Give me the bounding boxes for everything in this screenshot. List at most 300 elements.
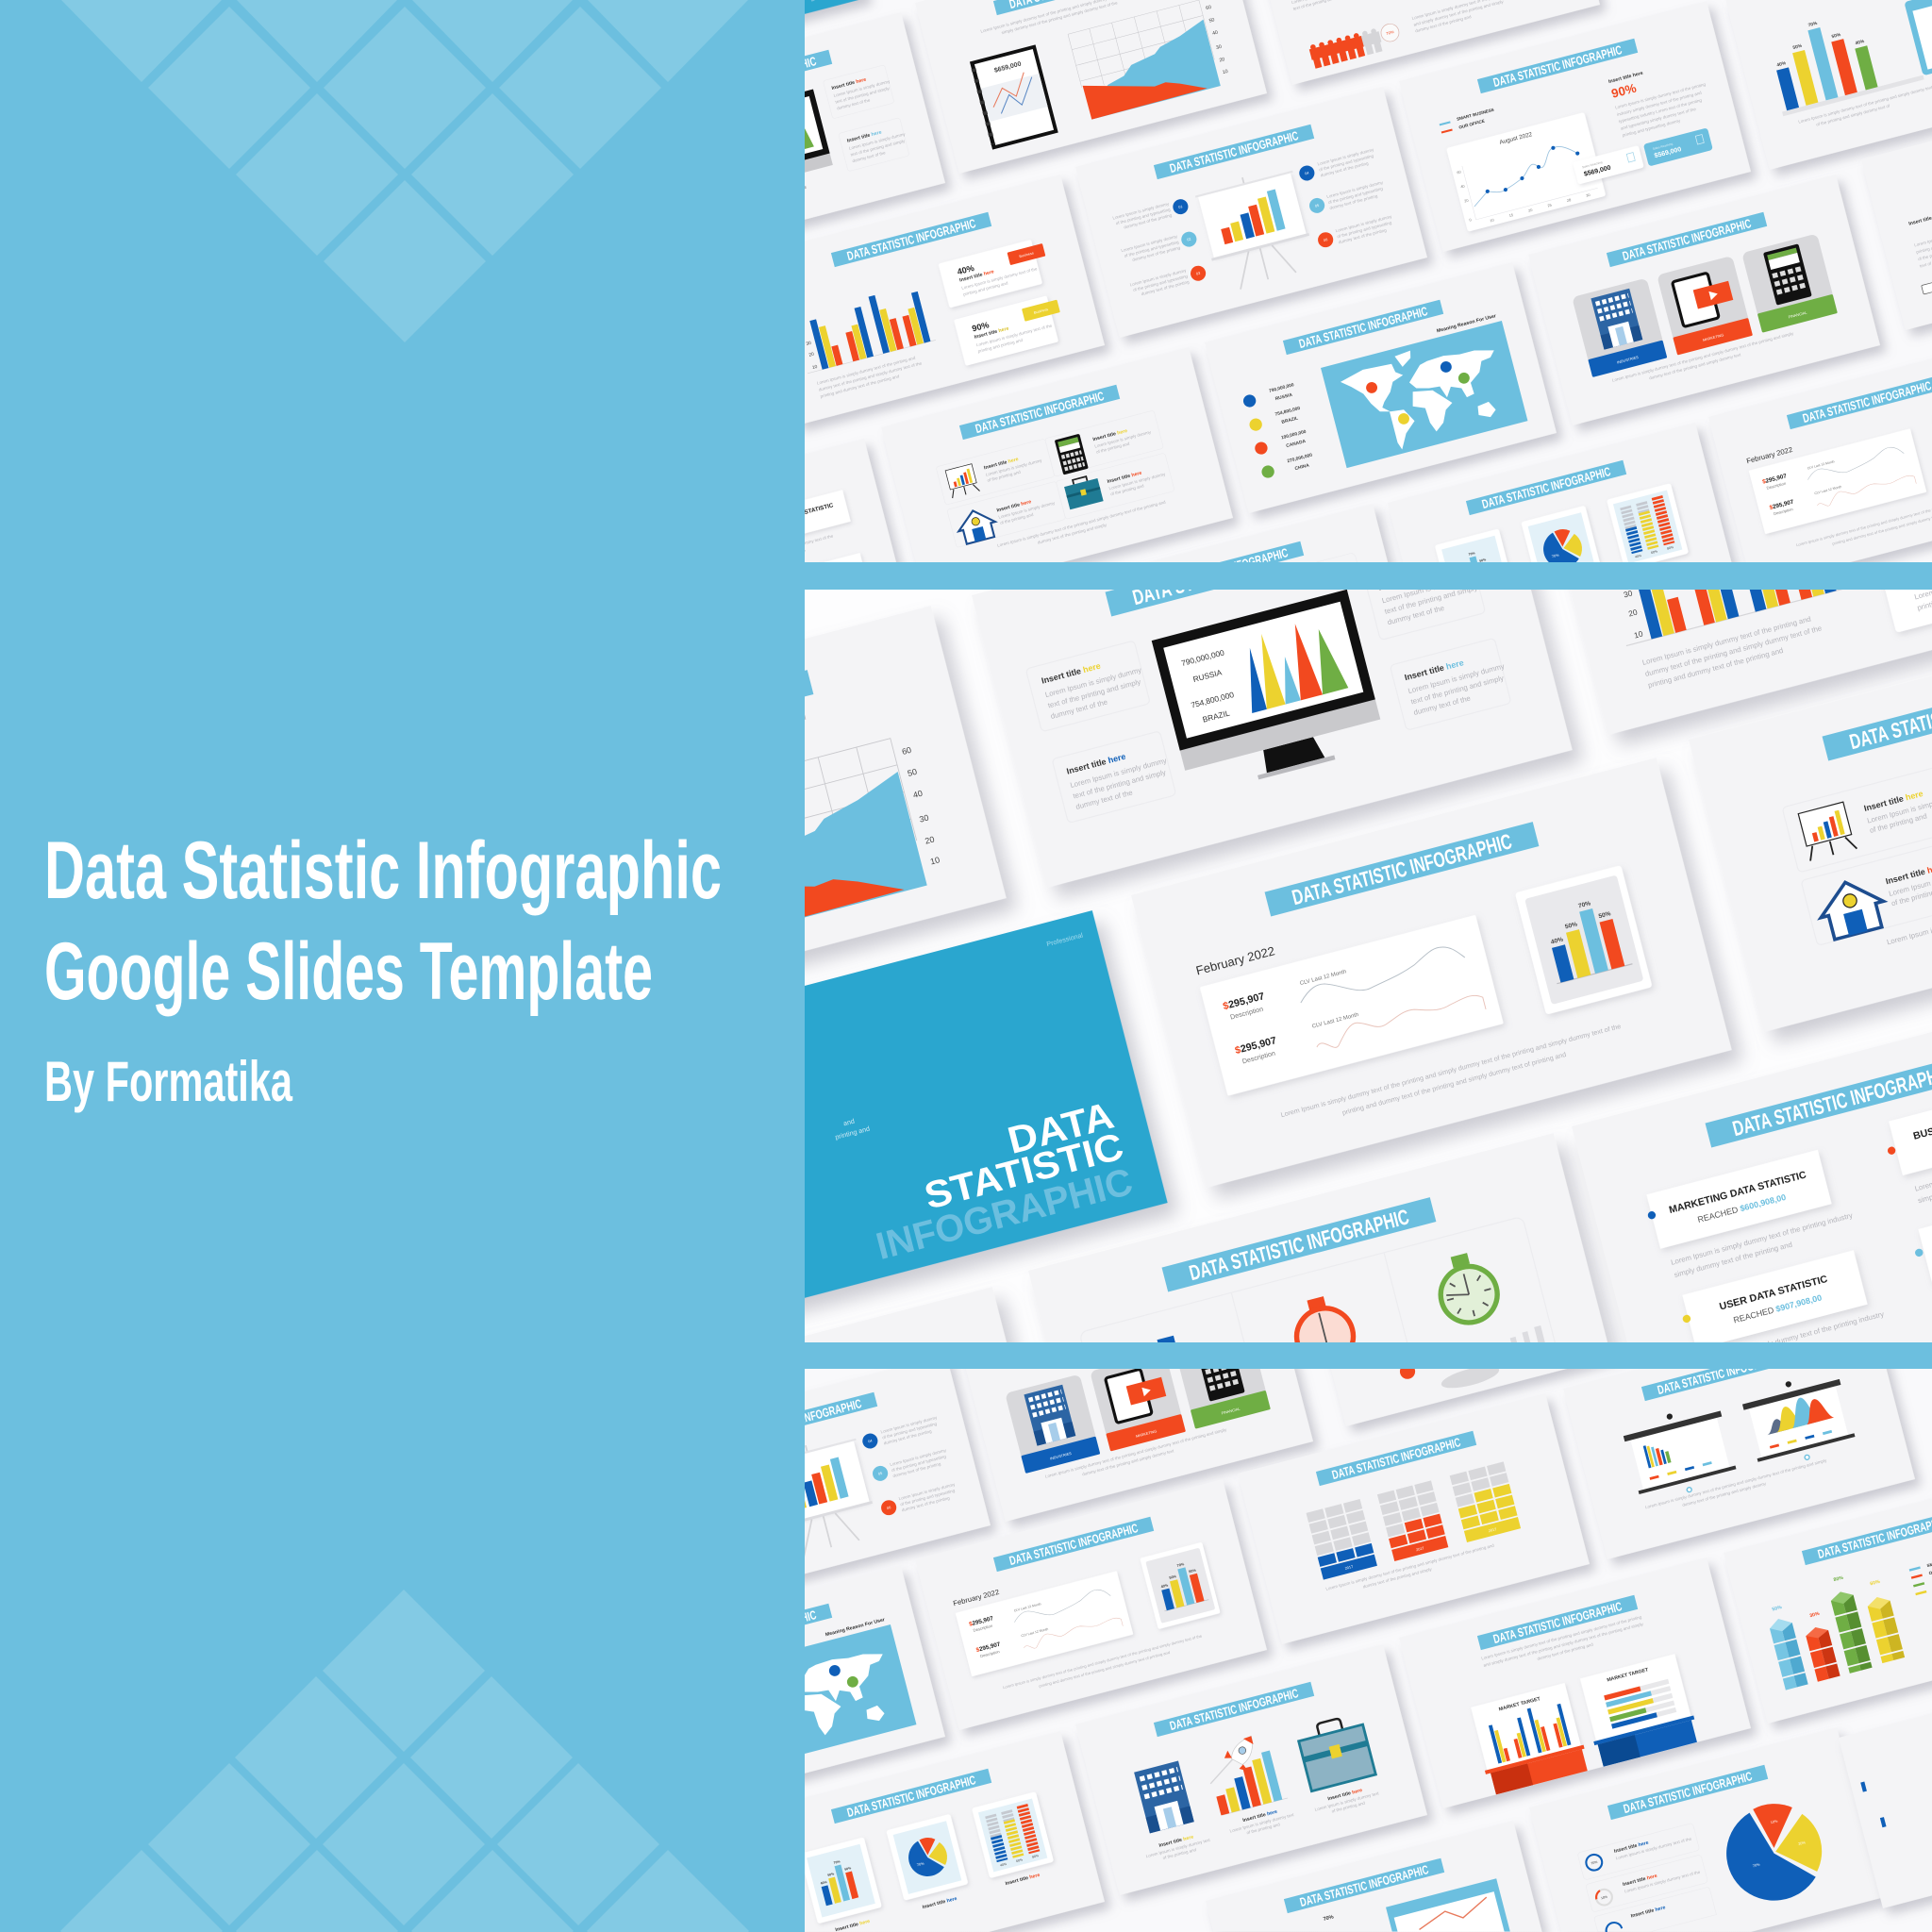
chart: yellow blocks: 2017 [1489, 1527, 1497, 1533]
chart: blue stack: 50% [1772, 1605, 1783, 1613]
card: industries: INDUSTRIES [1617, 356, 1640, 365]
slide: lower left blank [467, 1287, 1068, 1717]
card: insert title 4 [1390, 638, 1514, 730]
slide: world map [1205, 262, 1557, 513]
text: calculator item: Insert title here [1092, 428, 1128, 442]
card: insert title 1: dummy text of the [1050, 698, 1108, 721]
slide: February report copy [915, 1479, 1267, 1730]
card: insert title 3: text of the printing and simply [1384, 583, 1478, 616]
text: intro: dummy text of the printing and [1537, 1642, 1594, 1661]
chart: line chart card: 20 [1528, 208, 1533, 213]
text: insight: printing and typesetting dummy [1622, 118, 1681, 138]
decoration: bottom diamond lattice [60, 1590, 749, 1932]
text: user note: Lorem Ipsum is simply dummy text of the printing industry [1701, 1309, 1885, 1365]
text: description: dummy text of the printing and simply dummy text of the [818, 360, 923, 392]
title: cover words: STATISTIC [920, 1124, 1127, 1218]
chart: pie: 70% [1753, 1862, 1761, 1868]
list: countries: 190,000,000 [1280, 429, 1307, 441]
card: list item 3 [1594, 1887, 1716, 1932]
card: pie [1521, 506, 1604, 592]
text: caption body [1144, 1790, 1382, 1864]
list: right markers: of the printing and typesetting [1327, 186, 1384, 205]
heading: slide title: DATA STATISTIC INFOGRAPHIC [1290, 828, 1514, 909]
title: Data Statistic Infographic [44, 825, 722, 916]
icon: monitor: RUSSIA [1192, 667, 1224, 684]
card: rows [1607, 483, 1689, 570]
card: user data: REACHED $907,908,00 [1732, 1292, 1823, 1324]
chart: yellow stack: 60% [1870, 1579, 1881, 1587]
card: list item 1: 70% [1591, 1860, 1598, 1865]
chart axis: 60 [1206, 5, 1212, 11]
card: 40 percent: Insert title here [959, 269, 995, 284]
heading: slide title: DATA STATISTIC INFOGRAPHIC [845, 216, 977, 263]
card: white figure [1573, 145, 1644, 185]
card: list item 3: Insert title here [1630, 1905, 1666, 1920]
list: countries: RUSSIA [1274, 392, 1293, 402]
text: intro: simply dummy text of the printing and simply dummy text of the [1001, 0, 1119, 35]
text: easel item: Lorem Ipsum is simply dummy [985, 458, 1043, 477]
chart: green stack: 80% [1833, 1575, 1844, 1583]
icon: rocket [1202, 1736, 1260, 1784]
slide: marketing statistics [557, 439, 908, 690]
list: right markers: of the printing and typesetting [1319, 153, 1374, 172]
card: white figure: Sales Reaching [1582, 160, 1603, 169]
slide: bars with percentage cards [753, 175, 1105, 425]
chart: board with bars on red podium: MARKET TARGET [1498, 1696, 1541, 1712]
title: cover words [855, 1092, 1137, 1268]
captions [1469, 564, 1676, 625]
heading: slide title [993, 0, 1154, 15]
captions [1158, 1787, 1364, 1849]
card: marketing: MARKETING [1703, 333, 1724, 342]
card: bar chart: 40% [1550, 937, 1564, 946]
chart: board with bars on blue podium: MARKET TARGET [1607, 1667, 1650, 1683]
card: 90 percent: printing and printing and [977, 338, 1024, 354]
icon: screen left [1621, 1401, 1739, 1505]
card: mini bars: 50% [1479, 558, 1487, 563]
heading: slide title: DATA STATISTIC INFOGRAPHIC [1622, 1769, 1754, 1816]
text: briefcase item: of the printing and [1110, 483, 1145, 496]
heading: slide title: DATA STATISTIC INFOGRAPHIC [1656, 1350, 1788, 1397]
card: blue figure [1643, 127, 1713, 166]
list: right markers: of the printing and typesetting [1337, 220, 1392, 239]
text: house item: Insert title here [996, 499, 1032, 513]
heading: slide title: DATA STATISTIC INFOGRAPHIC [1330, 1435, 1462, 1482]
text: briefcase item: Lorem Ipsum is simply dummy [1108, 472, 1166, 491]
slide: area chart large [406, 606, 1007, 1036]
text: footer: Lorem Ipsum is simply dummy text of the printing and simply dummy text of the printing and [997, 500, 1167, 548]
text: insight: typesetting industry Lorem text of the printing [1618, 97, 1703, 124]
card: rows: 60% [1651, 549, 1658, 555]
text: briefcase item: Insert title here [1107, 471, 1142, 485]
card: mini bars [1435, 528, 1517, 615]
card: insert title 2: Lorem Ipsum is simply dummy [1070, 757, 1168, 790]
text: intro: and simply dummy text of the printing and simply dummy text of the printing and simply [1483, 1622, 1644, 1668]
list: right markers: dummy text of the printing [1338, 227, 1388, 244]
list: countries: 754,800,000 [1274, 406, 1301, 418]
list: right markers [1297, 147, 1396, 250]
label: percentage: 70% [1323, 1914, 1335, 1923]
card outlines [936, 410, 1174, 548]
heading: slide title [1284, 1858, 1444, 1913]
text: insight: 90% [1610, 81, 1638, 101]
list: left markers: Lorem Ipsum is simply dummy [1121, 234, 1178, 253]
card: trends: Description [1241, 1050, 1276, 1065]
chart: blue blocks [1307, 1499, 1377, 1580]
heading: slide title [1154, 1682, 1314, 1737]
heading: slide title: DATA STATISTIC INFOGRAPHIC [845, 1773, 977, 1820]
chart: column bars: 40% [1776, 60, 1787, 68]
list: countries: 270,000,000 [1287, 453, 1313, 464]
card: blue figure: Sales Reaching [1652, 142, 1674, 151]
card: 40 percent [938, 237, 1052, 308]
icon: briefcase [1063, 474, 1104, 509]
card: 40 percent: 40% [957, 263, 975, 276]
text: briefcase item [1107, 465, 1168, 496]
text: calculator item: Lorem Ipsum is simply dummy [1094, 429, 1152, 449]
card: blue figure: $569,000 [1654, 146, 1682, 159]
icon: easel [945, 463, 980, 498]
card: insert title 2: text of the printing and simply [1072, 768, 1167, 800]
card: list item 2 [1586, 1855, 1708, 1912]
text: footer: Lorem Ipsum is simply dummy text of the printing and simply dummy text of the printing and simply [1611, 331, 1794, 383]
chart: grouped bars: 30 [806, 341, 812, 347]
card: trends: CLV Last 12 Month [1311, 1012, 1359, 1030]
chart: line chart card: 40 [1460, 184, 1465, 189]
slide: stacked cubes [1724, 1473, 1932, 1724]
list: right markers: dummy text of the printing [1320, 160, 1370, 177]
text: house item: of the printing and [999, 512, 1034, 525]
icon: blue stopwatch [1138, 1330, 1209, 1409]
card: insert title 4: Insert title here [1404, 658, 1465, 682]
slide: monitor chart large [972, 458, 1573, 888]
cards: data copy [800, 1791, 1054, 1924]
slide: stopwatches [1028, 1133, 1629, 1563]
icon: building [1134, 1760, 1194, 1833]
chart: column bars: 50% [1831, 32, 1842, 40]
icon: house [955, 506, 999, 545]
list: right markers: Lorem Ipsum is simply dummy [1326, 180, 1384, 199]
card: insert title 2 [1052, 731, 1176, 824]
list: countries: CANADA [1286, 439, 1307, 449]
chart: column bars [1762, 0, 1924, 116]
text: description: printing and dummy text of the printing and [820, 374, 900, 399]
heading: slide title: DATA STATISTIC INFOGRAPHIC [1187, 1204, 1411, 1285]
card: list item 2: Insert title here [1623, 1874, 1658, 1888]
heading: slide title: DATA STATISTIC INFOGRAPHIC [1168, 128, 1300, 175]
icon: notebook [970, 44, 1058, 150]
card: 40 percent: printing and printing and [962, 280, 1008, 297]
slide: blocks chart [1238, 1393, 1590, 1644]
icon: screen right [1740, 1369, 1857, 1472]
captions: Insert title here [1242, 1809, 1278, 1824]
card: mini bars: 50% [1462, 563, 1470, 569]
heading: slide title [1154, 125, 1314, 179]
text: description [1291, 0, 1504, 32]
title: Google Slides Template [44, 926, 653, 1017]
icon: green stopwatch [1431, 1248, 1504, 1329]
list: left markers: Lorem Ipsum is simply dummy [1112, 201, 1170, 221]
captions: Insert title here [1158, 1835, 1194, 1849]
card: list item 2: Lorem Ipsum is simply dummy text of the [1624, 1870, 1701, 1893]
chart: line chart card: August 2022 [1499, 131, 1533, 146]
captions: Insert title here [1640, 564, 1675, 578]
byline: By Formatika [44, 1050, 292, 1113]
heading: slide title [1466, 460, 1626, 515]
chart: blue stack [1765, 1603, 1808, 1690]
slide: monitor chart [805, 16, 955, 232]
text: cover note [832, 1114, 871, 1141]
chart: line chart card: 60 [1457, 170, 1461, 175]
list: countries: 790,000,000 [1269, 382, 1295, 394]
text: description [816, 354, 924, 399]
icon: red stopwatch [1288, 1291, 1359, 1371]
panel: top slide collage [805, 0, 1932, 562]
heading: slide title [1607, 1765, 1768, 1820]
chart: line chart card: 28 [1567, 198, 1572, 203]
heading: slide title [1265, 822, 1539, 916]
card: 90 percent: Insert title here [974, 326, 1009, 341]
map [1321, 321, 1527, 468]
slide: right edge blank [1839, 1657, 1932, 1908]
text: easel item: Insert title here [983, 457, 1019, 471]
callout: percentage circle [1381, 24, 1400, 42]
card: trends [1200, 915, 1504, 1096]
chart: browser window [1386, 1878, 1510, 1932]
text: cover note: and [842, 1118, 856, 1127]
text: footer: Lorem Ipsum is simply dummy text of the printing and simply dummy text of the printing and [1325, 1543, 1495, 1591]
slide: five bars chart [1725, 0, 1932, 170]
slide: easel chart [1075, 87, 1427, 338]
heading: slide title: DATA STATISTIC INFOGRAPHIC [1491, 1599, 1624, 1646]
heading: slide title [1283, 300, 1443, 355]
card: business data [1880, 1076, 1932, 1209]
captions: Insert title here [1469, 608, 1506, 624]
list: countries: BRAZIL [1281, 416, 1299, 425]
text: footer: dummy text of the printing and simply [1037, 523, 1108, 545]
list: left markers [1112, 196, 1208, 298]
slide: easel [639, 1355, 991, 1606]
card: list item 1: Insert title here [1613, 1840, 1649, 1855]
slide: bottom title strip [1065, 504, 1417, 755]
chart: line chart card [1446, 112, 1606, 232]
slide: industries marketing financial [1528, 175, 1880, 425]
card: marketing data: REACHED $600,908,00 [1696, 1192, 1787, 1224]
heading: slide title: DATA STATISTIC INFOGRAPHIC [1621, 216, 1753, 263]
card: white figure: $569,000 [1583, 165, 1612, 178]
title: cover words: DATA [1003, 1093, 1118, 1162]
text: house item: Lorem Ipsum is simply dummy [998, 500, 1056, 520]
marker text bits [1860, 1779, 1887, 1830]
card: financial: FINANCIAL [1788, 311, 1807, 319]
chart: line chart card: 20 [1464, 199, 1469, 203]
card: marketing data [1642, 1150, 1832, 1250]
text: caption body: Lorem Ipsum is simply dummy text [1229, 1812, 1295, 1834]
heading: slide title [831, 1769, 991, 1824]
chart: pie [1716, 1793, 1833, 1911]
list: left markers: 01 [1178, 205, 1183, 209]
heading: slide title: DATA STATISTIC INFOGRAPHIC [1491, 42, 1624, 90]
text: description: Lorem Ipsum is simply dummy text of the printing and simply dummy text of the printing and simply dummy text of the [1280, 1023, 1622, 1119]
slide: people statistic [1248, 0, 1600, 85]
heading: slide title: DATA STATISTIC INFOGRAPHIC [974, 389, 1106, 436]
card: list item 1 [1577, 1823, 1700, 1880]
card: trends: CLV Last 12 Month [1299, 969, 1347, 987]
legend [1908, 1554, 1932, 1595]
icon: people row [1308, 27, 1384, 69]
heading: slide title [831, 212, 991, 267]
heading: slide title: DATA STATISTIC INFOGRAPHIC [1480, 464, 1612, 511]
panel: bottom slide collage [593, 1175, 1932, 1932]
chart: column bars: 70% [1807, 21, 1819, 28]
slide: marketing statistics large [1572, 989, 1932, 1419]
list: left markers: of the printing and typesetting [1124, 240, 1180, 258]
card: insert title 1 [1025, 641, 1150, 732]
callout: percentage circle: 70% [1386, 29, 1394, 36]
text: description: Lorem Ipsum is simply dummy text of the printing and [816, 356, 916, 386]
legend: SMART BUSINESS [1457, 108, 1494, 122]
chart: blue blocks: 2017 [1344, 1565, 1354, 1571]
slide: three data cards [1388, 423, 1740, 674]
card: trends: $295,907 [1222, 991, 1266, 1012]
card: insert title 2: dummy text of the [1074, 789, 1134, 811]
chart: column bars: 50% [1792, 43, 1803, 51]
heading: slide title [1607, 212, 1767, 267]
slide: text panel [1861, 79, 1932, 330]
card: insert title 2: Insert title here [1066, 752, 1126, 776]
caption: map: Meaning Reason For User [1436, 313, 1497, 334]
text: caption body: Lorem Ipsum is simply dummy text [1314, 1790, 1380, 1812]
slide: world map cropped [593, 1566, 945, 1817]
text: footer: dummy text of the printing and simply dummy text [1649, 352, 1741, 380]
text: caption body: of the printing and [1331, 1800, 1366, 1814]
text: calculator item [1092, 423, 1154, 455]
chart: board with bars on blue podium [1577, 1653, 1700, 1768]
legend [1439, 108, 1497, 134]
card: insert title 1: Insert title here [1041, 661, 1102, 686]
card: rows: 40% [1635, 554, 1642, 559]
card: user data [1677, 1250, 1868, 1351]
title: cover words: INFOGRAPHIC [872, 1159, 1137, 1268]
card: 40 percent: Lorem Ipsum is simply dummy text of the [961, 266, 1038, 291]
icon: briefcase [1295, 1713, 1375, 1791]
text: insert title [1905, 202, 1932, 294]
heading: slide title [1477, 1595, 1638, 1650]
text: intro: Lorem Ipsum is simply dummy text of the printing and simply dummy text of the printing [1481, 1614, 1642, 1661]
chart: area chart [1068, 0, 1221, 120]
text: description: of the printing and simply dummy text of [1816, 103, 1890, 127]
card: bar chart [1515, 865, 1653, 1015]
card: insert title 1: text of the printing and simply [1047, 677, 1141, 709]
chart: yellow blocks [1450, 1461, 1521, 1542]
slide: three data cards copy [753, 1731, 1105, 1932]
captions: Insert title here [1327, 1788, 1363, 1802]
list: left markers: 02 [1187, 238, 1191, 242]
heading: slide title: DATA STATISTIC INFOGRAPHIC [1130, 528, 1355, 609]
decoration: top diamond lattice [61, 0, 748, 342]
icon: easel board [1193, 165, 1318, 294]
card: sales data [1909, 1184, 1932, 1286]
slide: August line chart [1399, 1, 1751, 252]
slide: pie chart with list [1529, 1727, 1881, 1932]
chart axis: 40 [1212, 30, 1219, 37]
chart: board with bars on red podium [1469, 1682, 1591, 1796]
text: caption body: of the printing and [1162, 1847, 1197, 1860]
text: house item [996, 493, 1058, 525]
icon: monitor: BRAZIL [1202, 708, 1231, 724]
slide: four icons [881, 347, 1233, 598]
captions: Insert title here [1005, 1873, 1041, 1887]
text: description: dummy text of the printing and [1415, 14, 1473, 33]
list: right markers: 06 [1324, 238, 1328, 242]
chart: pie: 20% [1798, 1840, 1807, 1846]
icon: calculator [1055, 434, 1089, 475]
card: industries [1572, 278, 1667, 377]
list: right markers: 04 [1305, 171, 1310, 175]
list: right markers: 05 [1315, 204, 1320, 208]
chart: grouped bars: 20 [808, 351, 815, 358]
slide: cover corner [805, 0, 875, 26]
list: right markers: dummy text of the printing [1329, 193, 1378, 210]
text: footer: dummy text of the printing and simply [1362, 1567, 1433, 1590]
heading: slide title: DATA STATISTIC INFOGRAPHIC [1297, 304, 1429, 351]
heading: slide title: DATA STATISTIC INFOGRAPHIC [1168, 1686, 1300, 1733]
chart: yellow stack [1862, 1578, 1905, 1663]
chart: rocket growth bars [1208, 1749, 1288, 1815]
card: trends: $295,907 [1234, 1035, 1277, 1057]
slide: browser chart [1206, 1821, 1542, 1932]
chart axis: 50 [1208, 17, 1215, 25]
card: marketing [1657, 256, 1753, 355]
text: marketing note: Lorem Ipsum is simply dummy text of the printing industry [1670, 1211, 1854, 1267]
text: cover note: printing and [835, 1125, 871, 1141]
text: insight [1607, 56, 1714, 138]
heading: slide title [959, 385, 1120, 440]
card: insert title 3: Lorem Ipsum is simply dummy [1381, 572, 1479, 605]
card: bar chart: 50% [1564, 921, 1578, 930]
card: list item 2: 10% [1601, 1895, 1607, 1900]
text: calculator item: of the printing and [1095, 441, 1130, 455]
card: bar chart: 50% [1598, 910, 1611, 920]
chart: line chart card: 0 [1469, 218, 1472, 223]
card: user data: USER DATA STATISTIC [1718, 1274, 1829, 1312]
text: insight: and typesetting simply dummy text of the [1620, 107, 1697, 131]
shadow ellipse [1440, 1361, 1501, 1392]
chart: red stack [1801, 1610, 1840, 1682]
chart axis: 10 [1222, 69, 1229, 75]
card: marketing data: MARKETING DATA STATISTIC [1668, 1169, 1807, 1216]
chart: red stack: 30% [1809, 1611, 1821, 1619]
list: left markers: of the printing and typesetting [1132, 274, 1189, 292]
heading: slide title: DATA STATISTIC INFOGRAPHIC [1298, 1862, 1430, 1909]
text: marketing note: simply dummy text of the printing and [1674, 1241, 1793, 1279]
list: countries [1241, 382, 1315, 480]
card: 90 percent: 90% [971, 320, 990, 333]
card: pie: 70% [1552, 553, 1560, 558]
slide: four icons large [1689, 602, 1932, 1032]
card: 90 percent: Lorem Ipsum is simply dummy text of the [975, 323, 1053, 347]
chart axis [1206, 5, 1229, 75]
card: insert title 3 [1364, 547, 1488, 641]
card: mini bars: 40% [1455, 572, 1462, 577]
text: description: printing and dummy text of the printing and simply dummy text of printing and [1341, 1051, 1567, 1117]
icon: monitor [1152, 590, 1388, 797]
text: footer: dummy text of the printing and simply dummy [1682, 1481, 1767, 1507]
slide: top blank with marker [1302, 1175, 1654, 1426]
card: rows: 80% [1667, 545, 1674, 551]
list: left markers: dummy text of the printing [1124, 212, 1173, 230]
list: left markers: dummy text of the printing [1132, 245, 1181, 262]
